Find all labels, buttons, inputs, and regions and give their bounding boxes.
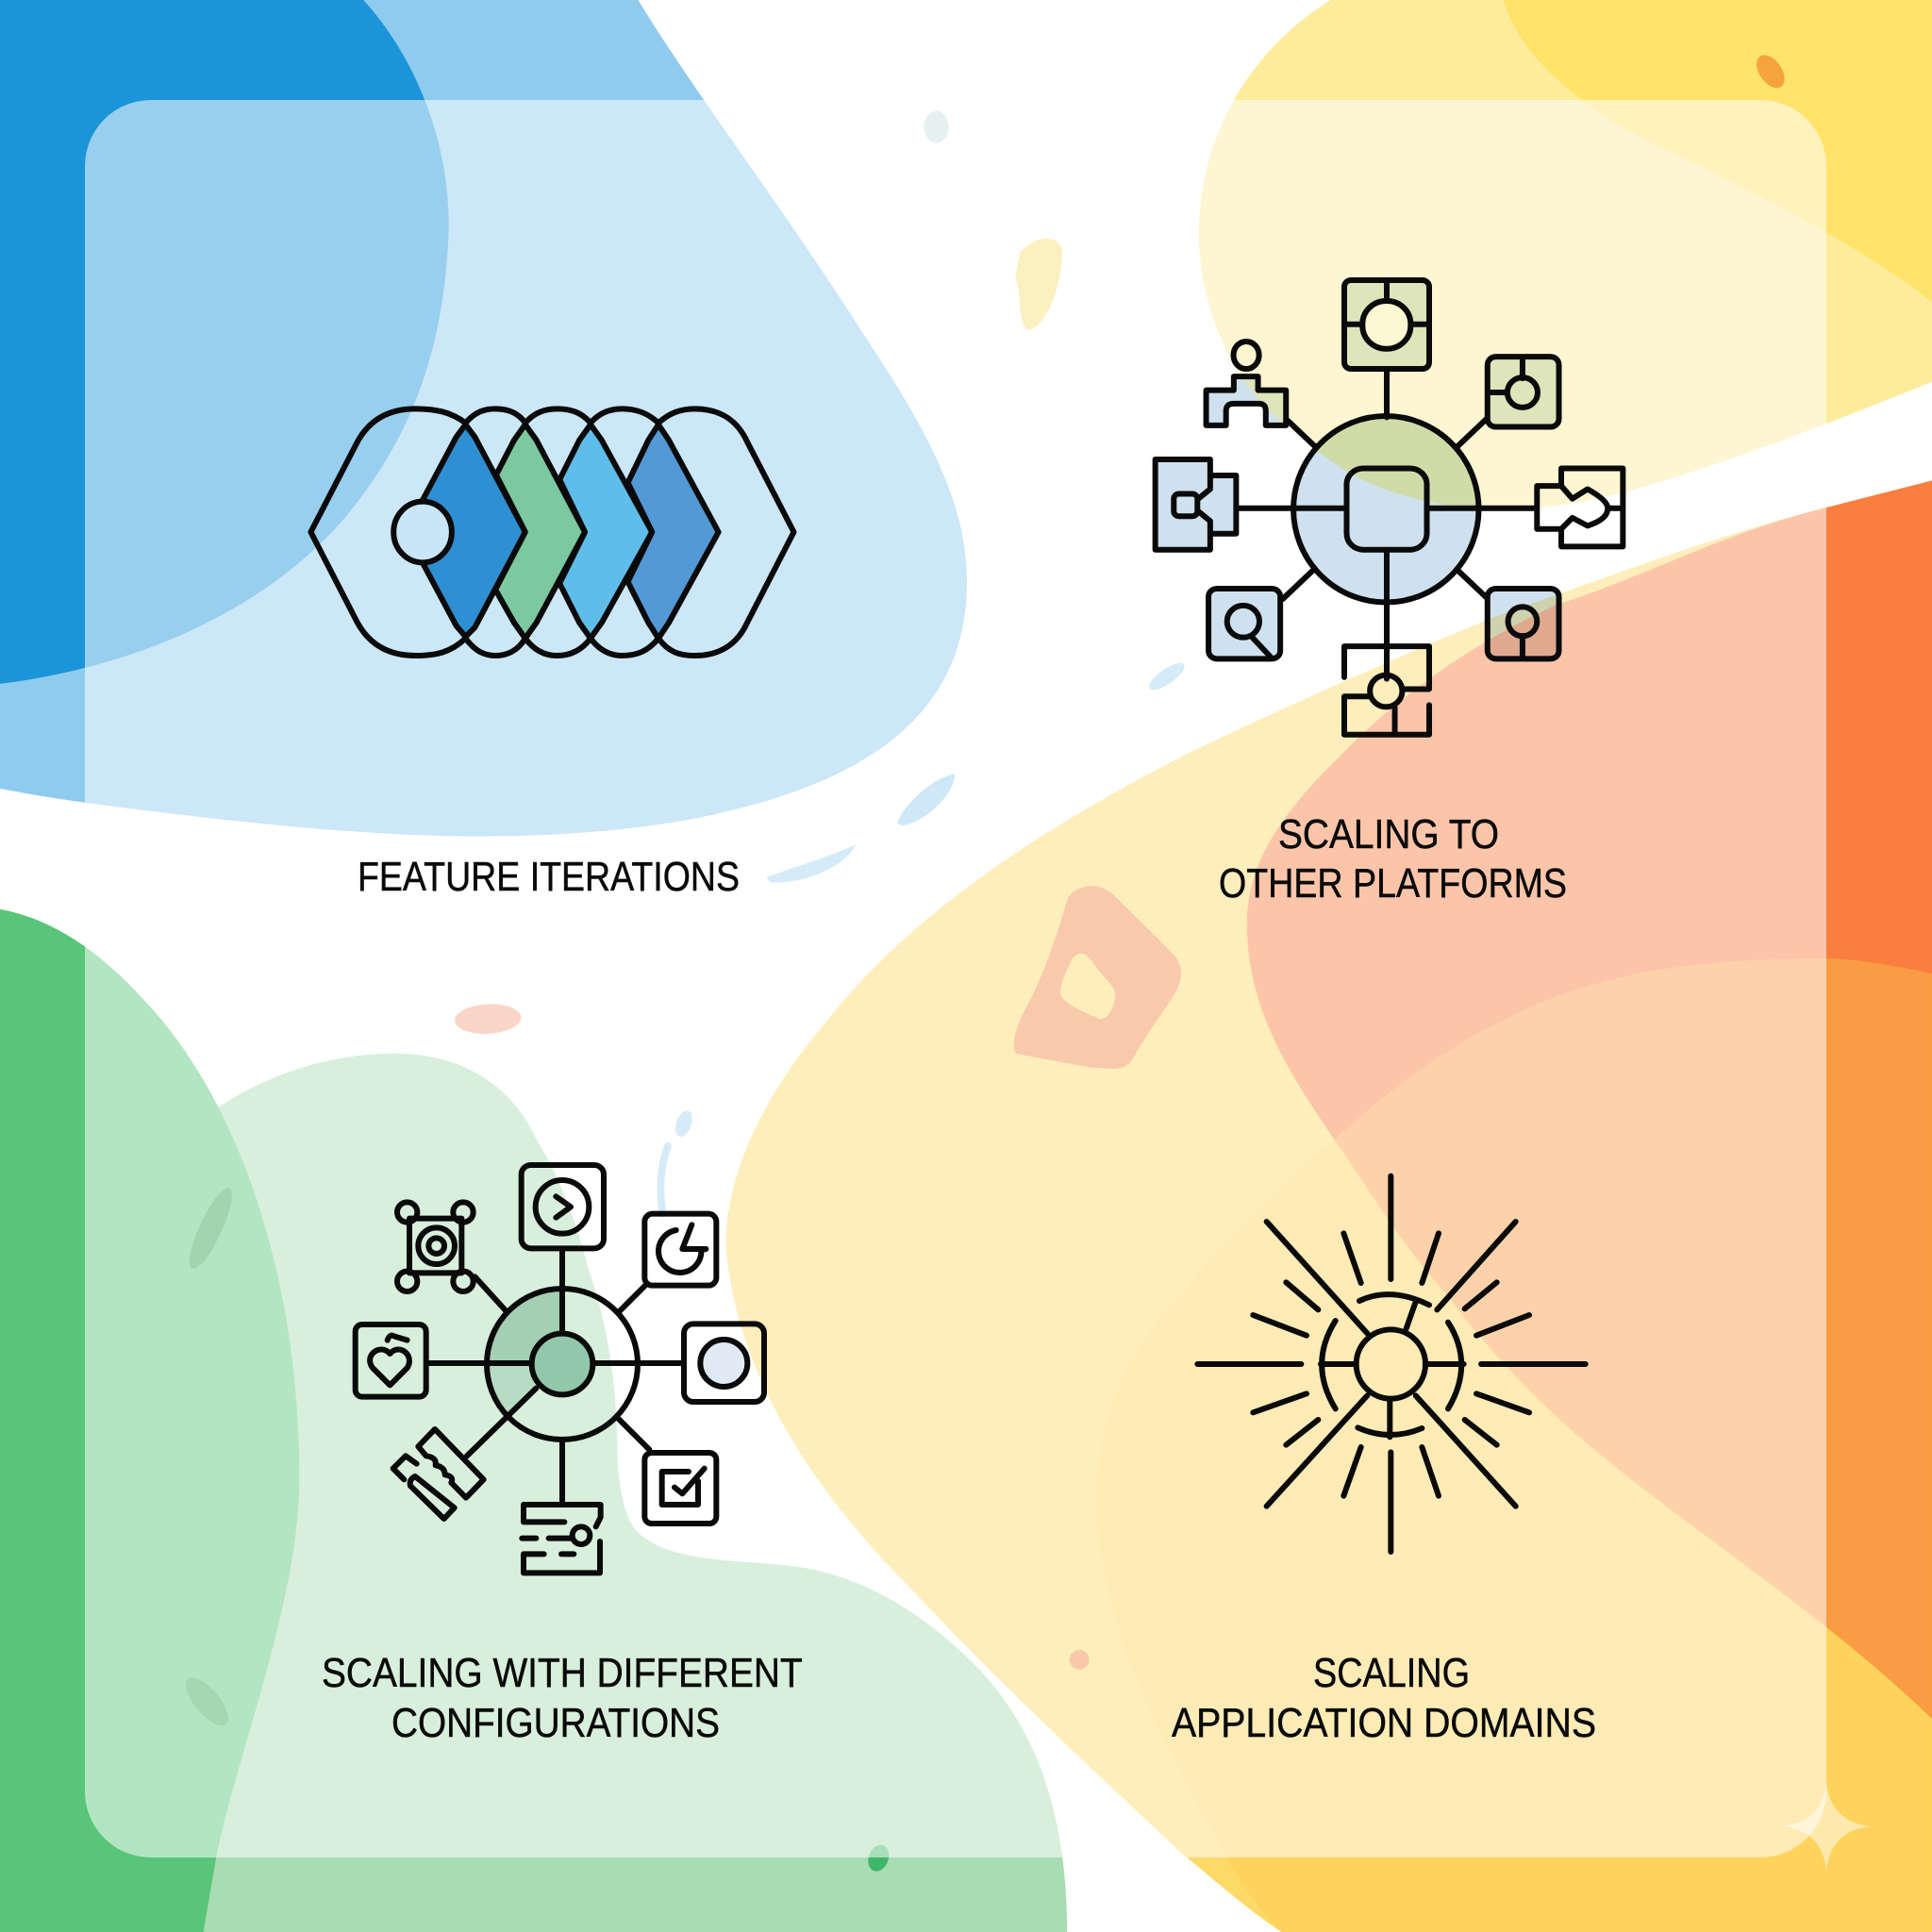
node: search xyxy=(1208,589,1280,658)
tint: green where over yellow xyxy=(1243,283,1557,506)
speck: pale teal xyxy=(924,111,949,143)
blob: light blue xyxy=(0,0,967,837)
tint: blue multiply layer xyxy=(1156,280,1558,658)
icon: scaling application domains sunburst xyxy=(1197,1176,1586,1552)
coral body xyxy=(1014,886,1181,1069)
speck: blue streak xyxy=(766,844,857,882)
node: bottom xyxy=(1344,646,1429,735)
node: tool xyxy=(393,1429,484,1519)
spokes xyxy=(427,1250,682,1503)
label: scaling application domains: SCALING xyxy=(1313,1650,1470,1696)
blob: large yellow xyxy=(726,480,1932,1932)
speck: pale yellow xyxy=(1015,239,1062,330)
speck: blue swoosh xyxy=(897,774,955,825)
speck: blue drop xyxy=(673,1108,695,1139)
speck: green lower xyxy=(178,1671,236,1732)
speck: peach dot xyxy=(1070,1650,1090,1670)
inner arcs xyxy=(1321,1294,1464,1437)
node: left xyxy=(1156,459,1236,550)
hub circle xyxy=(1293,416,1478,602)
long rays xyxy=(1197,1176,1586,1552)
centre circle xyxy=(1357,1329,1425,1399)
icon: sparkle star xyxy=(1781,1781,1872,1872)
label: scaling with different configurations: SCALING WITH DIFFERENT xyxy=(322,1650,802,1696)
start circle xyxy=(393,502,452,562)
decorative specks xyxy=(178,50,1790,1732)
outline: left hexagon xyxy=(310,408,466,656)
node: person xyxy=(1207,341,1286,425)
icon: scaling with different configurations hub xyxy=(356,1165,764,1573)
spokes xyxy=(1237,371,1535,679)
icon: scaling to other platforms hub xyxy=(1156,280,1623,735)
blob: coral with yellow hole xyxy=(1014,886,1181,1069)
speck: blue dash xyxy=(1145,658,1189,694)
node: top right xyxy=(1488,357,1558,427)
speck: green upper xyxy=(182,1184,240,1274)
hub ring xyxy=(487,1289,638,1440)
hub sector dark xyxy=(489,1290,562,1363)
icon tints: platform hub fills xyxy=(1156,280,1559,658)
speck: orange xyxy=(1751,50,1790,93)
node: bottom right xyxy=(1488,589,1558,658)
node: pie xyxy=(644,1214,716,1286)
outline: right hexagon xyxy=(658,408,793,656)
blob: dark green xyxy=(0,909,299,1932)
hub inner square xyxy=(1346,469,1426,550)
short rays xyxy=(1253,1233,1529,1496)
label: scaling with different configurations: CONFIGURATIONS xyxy=(391,1700,720,1746)
node: circle xyxy=(684,1324,764,1402)
node: right puzzle xyxy=(1537,469,1623,546)
chevron: green xyxy=(495,425,585,639)
blob: dark blue xyxy=(0,0,449,684)
chevron: dark blue xyxy=(423,425,525,637)
tint: salmon where over orange xyxy=(1491,606,1557,657)
node: form xyxy=(522,1505,601,1573)
blob: orange xyxy=(1247,480,1932,1719)
icon: feature iterations chevrons xyxy=(310,408,793,656)
node: checkbox xyxy=(644,1453,716,1524)
label: scaling to other platforms: SCALING TO xyxy=(1278,811,1499,858)
node: top xyxy=(1344,280,1429,369)
hub sector light xyxy=(489,1363,562,1417)
label: feature iterations: FEATURE ITERATIONS xyxy=(358,854,740,900)
outline: connecting arcs xyxy=(466,408,658,656)
label: scaling to other platforms: OTHER PLATFORMS xyxy=(1219,860,1567,907)
speck: coral xyxy=(454,1003,522,1036)
label: scaling application domains: APPLICATION DOMAINS xyxy=(1172,1700,1596,1746)
blob: light yellow xyxy=(1199,0,1932,509)
chevron: mid blue xyxy=(628,425,719,639)
node: target frame xyxy=(397,1202,474,1291)
node: heart xyxy=(356,1324,426,1397)
hub centre xyxy=(532,1334,592,1394)
blob: amber overlay xyxy=(1096,958,1932,1932)
blob: light green xyxy=(197,1054,1067,1932)
chevron: sky blue xyxy=(559,425,652,639)
speck: blue arc xyxy=(660,1146,668,1214)
node: arrow xyxy=(522,1165,604,1248)
speck: dark green xyxy=(865,1842,892,1874)
blob: bright yellow xyxy=(1503,0,1932,302)
yellow hole xyxy=(1060,954,1116,1019)
